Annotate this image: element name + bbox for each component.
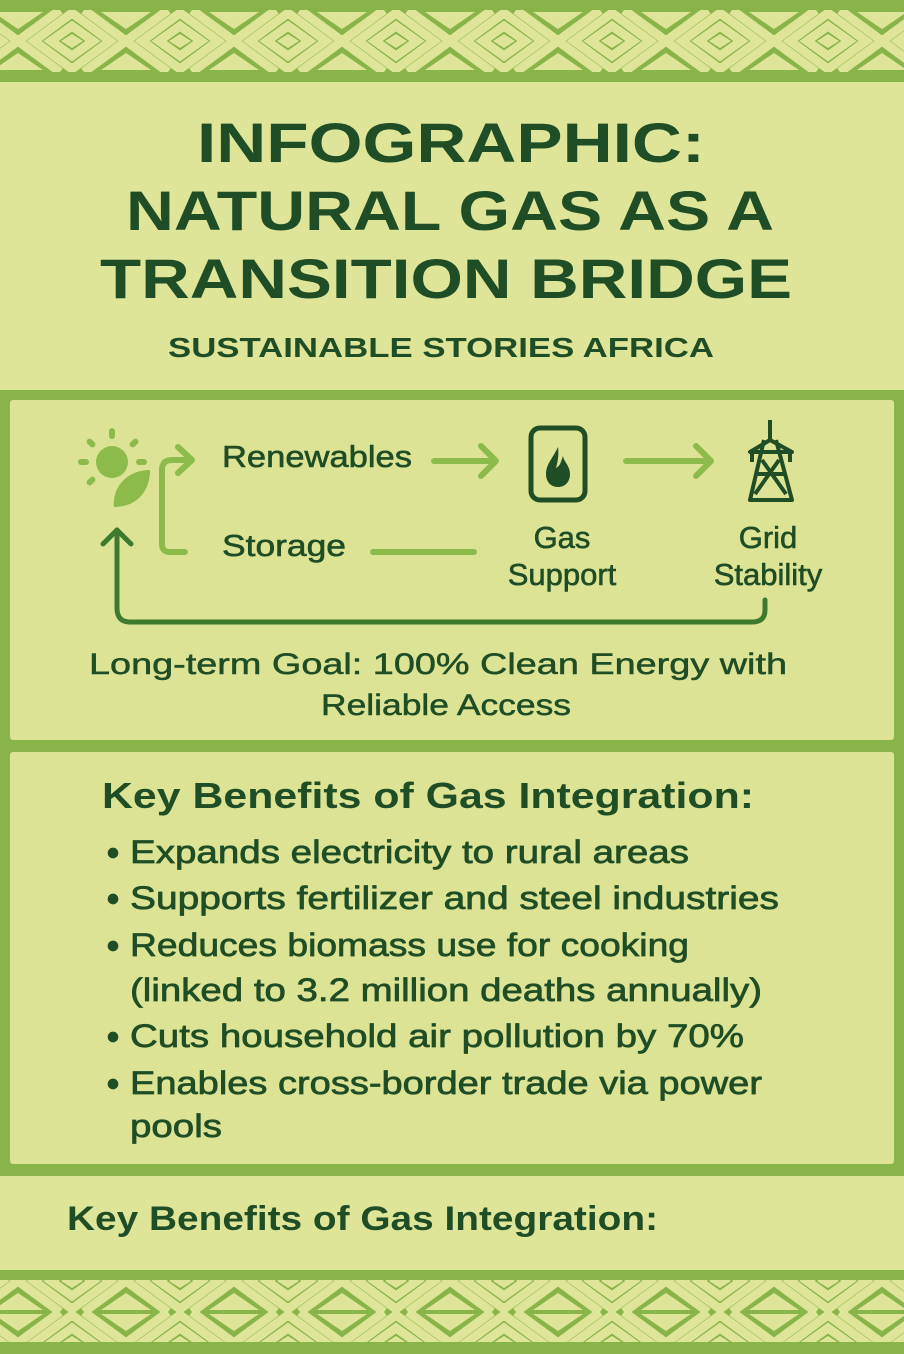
icon: gas flame — [531, 428, 585, 500]
subtitle: SUSTAINABLE STORIES AFRICA — [168, 332, 714, 363]
bottom border — [0, 1270, 904, 1354]
title: NATURAL GAS AS A — [126, 179, 774, 242]
label: Grid Stability — [714, 520, 823, 592]
long-term goal: Reliable Access — [321, 689, 571, 722]
label: Grid Stability: Stability — [714, 557, 823, 592]
title: INFOGRAPHIC: — [197, 111, 705, 174]
title: TRANSITION BRIDGE — [100, 247, 792, 310]
panel: key benefits — [10, 752, 894, 1164]
long-term goal — [89, 648, 787, 722]
bullet list: Enables cross-border trade via power — [130, 1065, 762, 1101]
arrow: gas to grid — [626, 446, 711, 476]
label: Gas Support — [508, 520, 617, 592]
bullet list: Supports fertilizer and steel industries — [130, 880, 779, 916]
title — [100, 111, 792, 310]
icon: transmission tower — [750, 420, 792, 500]
long-term goal: Long-term Goal: 100% Clean Energy with — [89, 648, 787, 681]
label: Grid Stability: Grid — [739, 520, 797, 555]
green frame — [0, 390, 904, 1176]
icon: sun and leaf — [78, 428, 150, 507]
label: Renewables: Renewables — [222, 439, 412, 474]
arrow: storage to renewables — [162, 447, 192, 552]
bullet list: Cuts household air pollution by 70% — [130, 1018, 744, 1054]
bullet list — [108, 834, 779, 1144]
top border — [0, 0, 904, 82]
bullet list: (linked to 3.2 million deaths annually) — [130, 972, 762, 1008]
bullet list: pools — [130, 1108, 222, 1144]
label: Gas Support: Gas — [534, 520, 590, 555]
bullet list: Reduces biomass use for cooking — [130, 927, 689, 963]
heading: Key Benefits of Gas Integration: — [102, 775, 754, 816]
arrow: renewables to gas — [434, 446, 496, 476]
bullet list: Expands electricity to rural areas — [130, 834, 689, 870]
panel: transition flow — [10, 400, 894, 740]
arrow: feedback loop — [103, 530, 765, 622]
label: Gas Support: Support — [508, 557, 617, 592]
connector line — [373, 549, 474, 555]
label: Storage: Storage — [222, 528, 346, 563]
footer heading: Key Benefits of Gas Integration: — [67, 1200, 658, 1238]
